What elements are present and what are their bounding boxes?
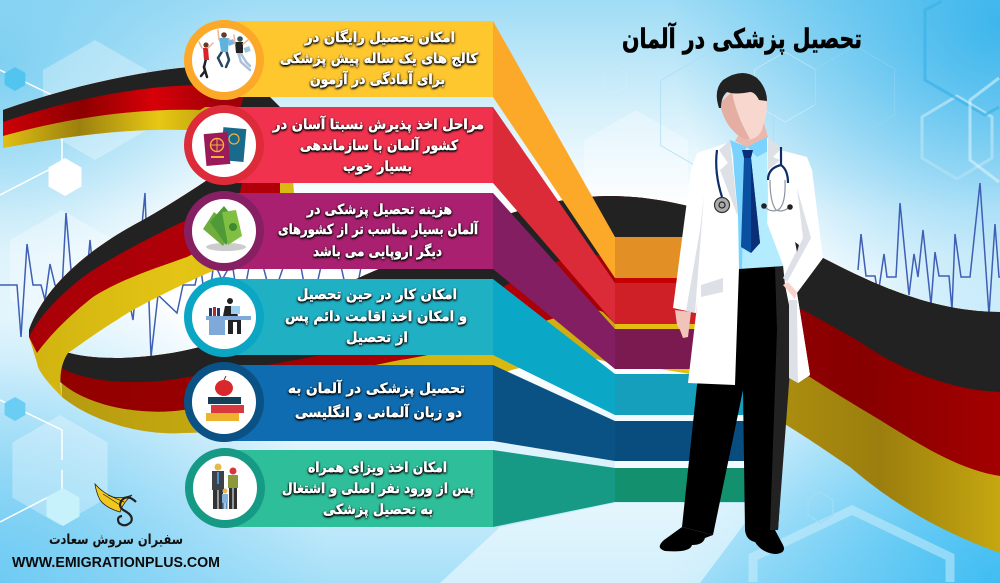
icon: office desk (188, 281, 260, 353)
icon: jumping students (188, 24, 260, 96)
text: languages: دو زبان آلمانی و انگلیسی (295, 403, 462, 421)
panel: easy admission (188, 107, 493, 183)
text: free tuition: برای آمادگی در آزمون (310, 70, 445, 88)
text: website: WWW.EMIGRATIONPLUS.COM (12, 555, 220, 571)
text: cost: هزینه تحصیل پزشکی در (306, 202, 452, 218)
text: work and residency (285, 287, 467, 346)
doctor illustration (660, 73, 823, 554)
text: languages: تحصیل پزشکی در آلمان به (288, 379, 465, 397)
panel: front colour bands (615, 237, 745, 502)
panel: free pre-med college (188, 21, 493, 97)
logo (12, 484, 220, 571)
ECG line left (0, 193, 493, 357)
icon: money (188, 195, 260, 267)
text: brand name: سفیران سروش سعادت (49, 532, 183, 548)
text: languages (288, 379, 465, 421)
text: visa: به تحصیل پزشکی (323, 502, 433, 518)
text: admission stages: مراحل اخذ پذیرش نسبتا آسان در (272, 115, 484, 133)
text: cost (278, 202, 479, 260)
text: admission stages: کشور آلمان با سازماندهی (300, 136, 459, 154)
icon: apple and dictionaries (188, 366, 260, 438)
text: visa (282, 460, 474, 518)
ECG line right (858, 183, 1000, 315)
icon: passports (188, 109, 260, 181)
German flag ribbon: left loop (29, 165, 294, 397)
text: visa: پس از ورود نفر اصلی و اشتغال (282, 481, 474, 497)
text: free tuition: کالج های یک ساله پیش پزشکی (280, 51, 479, 67)
German flag ribbon: upper band (3, 64, 281, 148)
icon: stethoscope (714, 147, 793, 212)
panel: companion visa (189, 450, 493, 527)
text: free tuition: امکان تحصیل رایگان در (304, 29, 455, 46)
panel: two languages (188, 365, 493, 441)
German flag ribbon: main wave (58, 196, 1000, 553)
title: تحصیل پزشکی در آلمان (622, 22, 862, 55)
icon: winged emblem (95, 484, 136, 525)
text: work and residency: و امکان اخذ اقامت دائم پس (285, 309, 467, 325)
text: admission stages: بسیار خوب (343, 159, 412, 175)
text: visa: امکان اخذ ویزای همراه (308, 460, 447, 476)
text: cost: دیگر اروپایی می باشد (313, 243, 442, 260)
panel: work while studying (188, 279, 493, 355)
text: admission stages (272, 115, 484, 175)
icon: family (189, 452, 261, 524)
panel: lower cost (188, 193, 493, 269)
text: free tuition (280, 29, 479, 88)
text: work and residency: امکان کار در حین تحصیل (297, 287, 457, 303)
panel: angled side bands (493, 21, 615, 527)
text: work and residency: از تحصیل (346, 330, 408, 346)
text: cost: آلمان بسیار مناسب تر از کشورهای (278, 220, 479, 238)
